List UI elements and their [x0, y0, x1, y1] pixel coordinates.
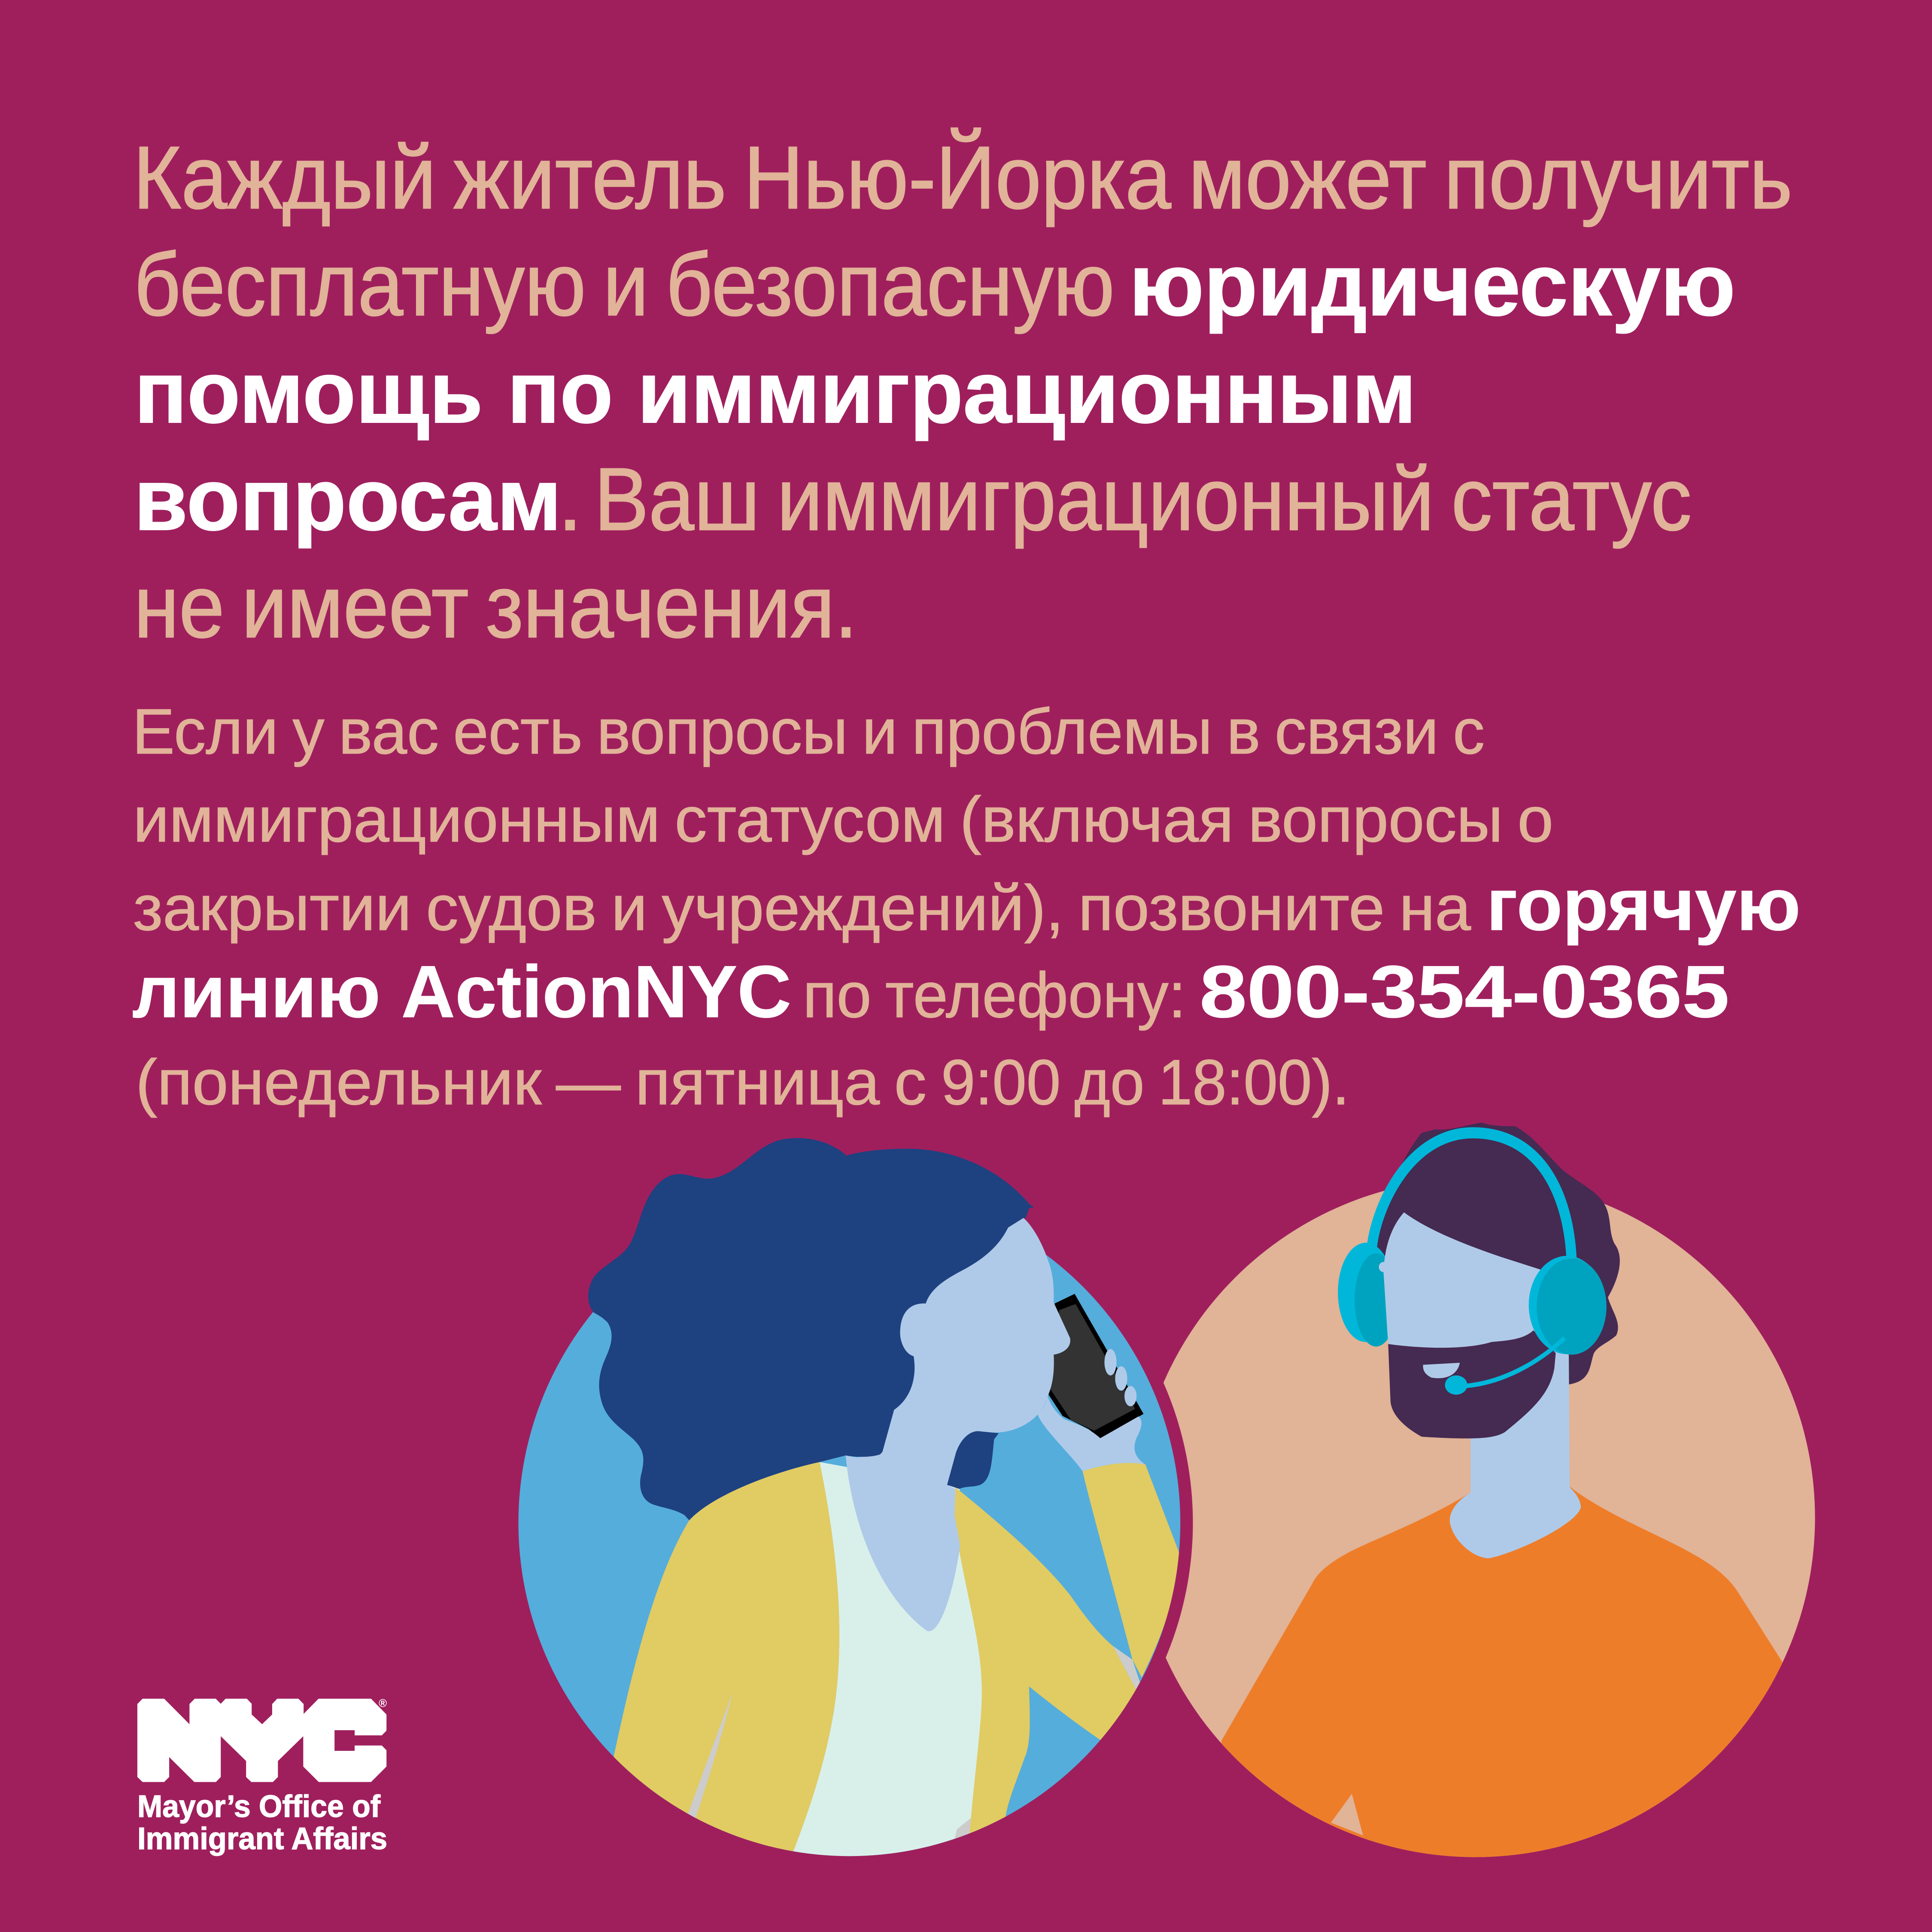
- face: [1383, 1212, 1540, 1348]
- jacket fold: [688, 1692, 732, 1819]
- jacket left: [614, 1462, 839, 1865]
- hair under chin: [947, 1431, 999, 1489]
- body line 1: Если у вас есть вопросы и проблемы в связи с: [132, 696, 1485, 767]
- jacket right: [954, 1487, 1137, 1865]
- body line 2: иммиграционным статусом (включая вопросы о: [133, 784, 1553, 855]
- logo: [137, 1697, 387, 1856]
- body text: [132, 696, 1801, 1118]
- body line 3 regular: закрытии судов и учреждений), позвоните на: [133, 872, 1471, 944]
- fingers: [1104, 1349, 1136, 1406]
- arm and hand: [1037, 1396, 1145, 1471]
- microphone: [1445, 1338, 1564, 1394]
- neck: [1450, 1351, 1581, 1558]
- left ear cup: [1338, 1243, 1397, 1346]
- registered mark: ®: [379, 1697, 387, 1710]
- logo text line 1: Mayor’s Office of: [137, 1789, 381, 1824]
- beige circle: [1136, 1179, 1815, 1857]
- maroon ring: [506, 1177, 1193, 1869]
- heading line 4 bold: вопросам: [134, 450, 562, 549]
- heading line 4 period: .: [558, 450, 583, 549]
- sleeve: [1083, 1463, 1180, 1677]
- illustration: woman on phone: [506, 1138, 1193, 1869]
- dark hair: [1375, 1123, 1620, 1385]
- beard: [1388, 1331, 1556, 1438]
- right ear cup: [1529, 1256, 1607, 1355]
- clipped body: [614, 1294, 1180, 1865]
- NYC wordmark: [137, 1699, 386, 1782]
- phone: [1048, 1294, 1144, 1438]
- heading: [133, 128, 1792, 656]
- orange shirt: [1221, 1487, 1789, 1865]
- heading line 3 bold: помощь по иммиграционным: [134, 343, 1416, 441]
- skin: head, neck and chest: [846, 1218, 1070, 1631]
- heading line 2 bold: юридическую: [1129, 236, 1735, 334]
- headband: [1372, 1133, 1571, 1259]
- body line 3 bold: горячую: [1486, 863, 1801, 946]
- mouth: [1423, 1363, 1460, 1378]
- phone number: 800-354-0365: [1200, 951, 1729, 1033]
- heading line 2 regular: бесплатную и безопасную: [134, 235, 1115, 334]
- heading line 5: не имеет значения.: [134, 557, 857, 656]
- logo text line 2: Immigrant Affairs: [137, 1822, 387, 1856]
- ear tab: [1379, 1262, 1409, 1272]
- hair: [588, 1138, 1034, 1520]
- underarm shadow: [1113, 1646, 1142, 1692]
- blue circle: [518, 1190, 1180, 1856]
- body line 4 regular: по телефону:: [803, 959, 1186, 1031]
- body line 5 part 1: (понедельник — пятница с: [136, 1046, 927, 1118]
- body line 4 bold: линию ActionNYC: [132, 951, 791, 1033]
- heading line 1: Каждый житель Нью-Йорка может получить: [133, 128, 1792, 227]
- heading line 4 regular: Ваш иммиграционный статус: [594, 450, 1692, 549]
- tank top: [792, 1462, 990, 1865]
- gray hem: [954, 1818, 971, 1839]
- body line 5 part 2: 9:00 до 18:00).: [941, 1046, 1349, 1118]
- illustration: man with headset: [1136, 1123, 1815, 1865]
